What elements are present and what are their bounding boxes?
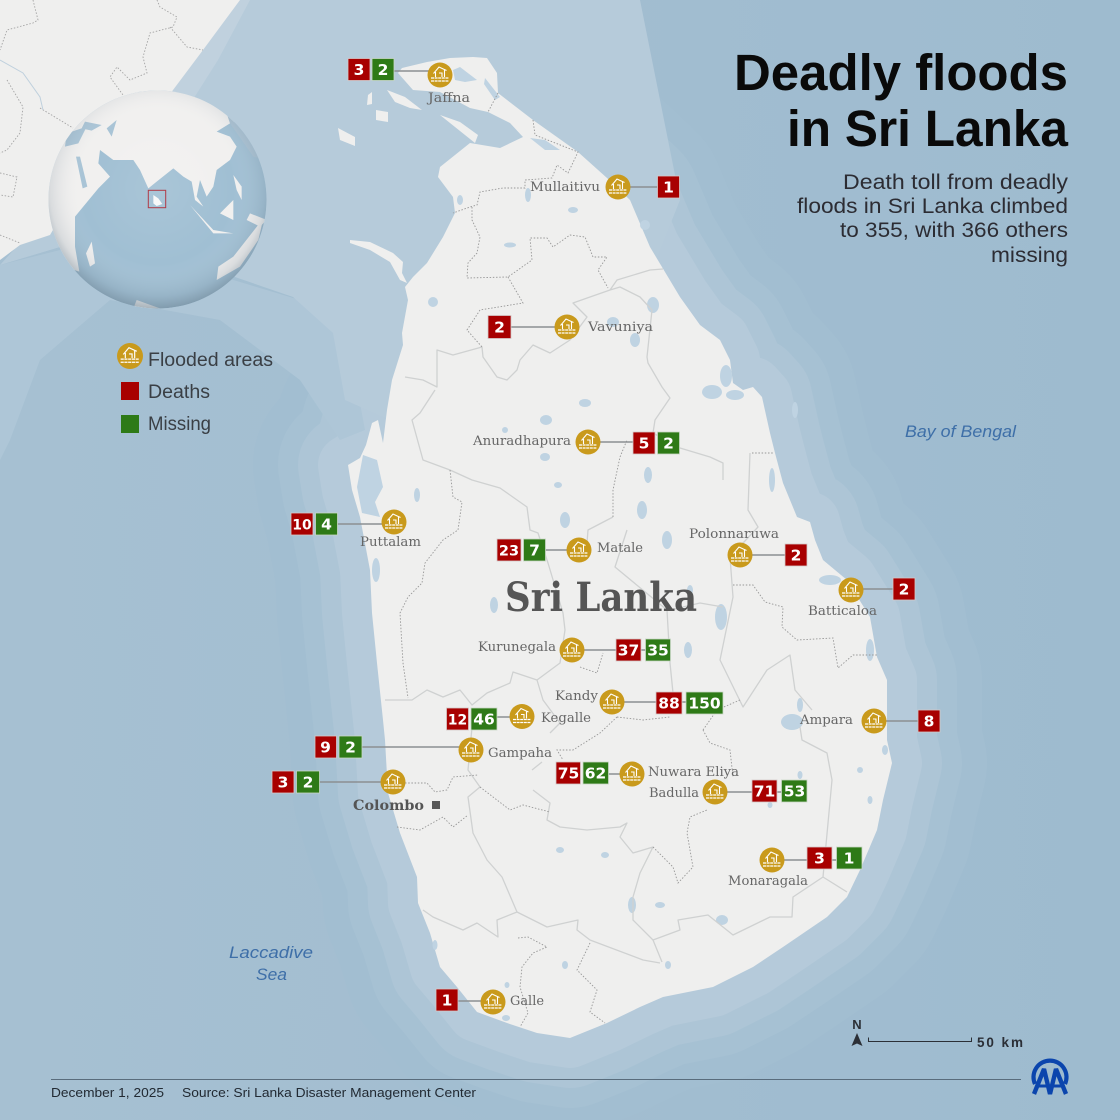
legend: Deaths	[148, 382, 210, 403]
marker: Badulla: 53	[784, 782, 805, 800]
legend: Missing	[148, 414, 211, 435]
province boundaries	[385, 269, 847, 963]
marker: Batticaloa	[808, 578, 915, 619]
marker: Jaffna: 3	[354, 61, 364, 79]
sea labels: Bay of Bengal	[905, 422, 1017, 441]
marker: Vavuniya: 2	[494, 318, 505, 336]
marker: Batticaloa: Batticaloa	[808, 604, 877, 619]
marker: Matale: Matale	[597, 541, 643, 556]
marker: Matale: 23	[499, 544, 519, 560]
legend	[117, 343, 273, 435]
marker: Anuradhapura: 5	[639, 434, 649, 452]
marker: Kegalle: Kegalle	[541, 711, 591, 726]
marker: Vavuniya	[488, 314, 653, 340]
marker: Badulla: Badulla	[649, 786, 699, 801]
icon: AA logo	[1034, 1061, 1066, 1094]
subtitle: to 355, with 366 others	[840, 218, 1068, 242]
marker: Monaragala: 1	[844, 850, 854, 868]
marker: Ampara: 8	[924, 712, 934, 730]
marker: Badulla: 71	[754, 782, 775, 800]
marker: Anuradhapura	[472, 430, 680, 454]
district boundaries	[397, 93, 877, 1027]
marker: Polonnaruwa: Polonnaruwa	[689, 527, 779, 542]
footer line	[51, 1078, 1021, 1080]
marker: Jaffna: 2	[378, 61, 388, 79]
marker: Colombo: 2	[303, 774, 313, 792]
marker: Kurunegala	[478, 638, 670, 662]
title	[734, 44, 1069, 157]
marker: Puttalam: Puttalam	[360, 535, 421, 550]
marker: Anuradhapura: Anuradhapura	[472, 434, 571, 449]
sea labels: Sea	[256, 965, 287, 984]
marker: Ampara	[799, 708, 940, 734]
marker: Mullaitivu: 1	[663, 178, 674, 196]
marker: Matale	[497, 538, 643, 562]
marker: Monaragala	[728, 847, 862, 889]
marker: Gampaha: 2	[345, 738, 356, 756]
marker: Gampaha: 9	[320, 738, 331, 756]
sea labels	[229, 422, 1017, 984]
subtitle: floods in Sri Lanka climbed	[797, 194, 1068, 218]
legend: flooded areas	[117, 343, 143, 369]
marker: Nuwara Eliya: Nuwara Eliya	[648, 765, 739, 780]
marker: Ampara: Ampara	[799, 713, 853, 728]
marker: Colombo: Colombo	[353, 798, 424, 814]
country label: Sri Lanka	[505, 574, 697, 621]
marker: Kegalle	[446, 704, 591, 730]
scale bar	[868, 1035, 1023, 1050]
legend: deaths	[121, 382, 139, 400]
marker: Puttalam: 10	[292, 518, 312, 534]
legend: missing	[121, 415, 139, 433]
marker: Matale: 7	[529, 542, 540, 560]
subtitle	[797, 170, 1068, 267]
lagoons and lakes	[357, 67, 888, 1021]
marker: Kegalle: 12	[448, 712, 467, 728]
marker: Kegalle: 46	[473, 710, 495, 728]
marker: Mullaitivu	[530, 174, 680, 200]
globe locator	[43, 83, 267, 308]
footer text	[51, 1086, 476, 1100]
marker: Nuwara Eliya: 62	[585, 764, 606, 782]
marker: Nuwara Eliya	[556, 762, 739, 786]
footer text: Source: Sri Lanka Disaster Management Center	[182, 1086, 476, 1100]
marker: Jaffna: Jaffna	[426, 91, 470, 106]
scale bar: 50 km	[977, 1035, 1023, 1050]
marker: Galle	[436, 989, 544, 1014]
marker: Monaragala: 3	[814, 850, 825, 868]
marker: Vavuniya: Vavuniya	[587, 320, 653, 335]
marker: Kandy	[555, 689, 723, 714]
marker: Batticaloa: 2	[899, 580, 909, 598]
marker: Puttalam	[291, 510, 421, 550]
subtitle: missing	[991, 243, 1068, 267]
marker: Colombo	[272, 770, 440, 814]
marker: Kurunegala: Kurunegala	[478, 640, 556, 655]
footer text: December 1, 2025	[51, 1086, 164, 1100]
locator box	[148, 190, 166, 208]
marker: Galle: 1	[442, 992, 452, 1010]
marker: Mullaitivu: Mullaitivu	[530, 180, 600, 195]
north arrow	[852, 1017, 862, 1046]
marker: Kandy: Kandy	[555, 689, 599, 704]
marker: Monaragala: Monaragala	[728, 874, 808, 889]
marker: Kandy: 88	[658, 694, 680, 712]
islands	[338, 90, 478, 283]
marker: Gampaha: Gampaha	[488, 746, 552, 761]
marker: Nuwara Eliya: 75	[558, 764, 579, 782]
marker: Gampaha	[315, 736, 552, 762]
marker: Galle: Galle	[510, 994, 544, 1009]
marker: Jaffna	[348, 58, 470, 106]
marker: Polonnaruwa	[689, 527, 807, 568]
sea labels: Laccadive	[229, 943, 313, 962]
title: in Sri Lanka	[787, 100, 1069, 157]
legend: Flooded areas	[148, 350, 273, 371]
marker: Kandy: 150	[688, 694, 721, 712]
marker: Puttalam: 4	[321, 516, 332, 534]
marker: Kurunegala: 35	[647, 642, 669, 660]
marker: Colombo: 3	[278, 774, 288, 792]
marker: Anuradhapura: 2	[663, 434, 674, 452]
marker: Badulla	[649, 780, 807, 804]
neighbouring land: India	[0, 0, 240, 260]
north arrow: N	[852, 1017, 862, 1032]
map: Sri Lanka land	[338, 57, 892, 1038]
title: Deadly floods	[734, 44, 1068, 101]
marker: Kurunegala: 37	[618, 642, 639, 660]
marker: Polonnaruwa: 2	[791, 546, 801, 564]
subtitle: Death toll from deadly	[843, 170, 1068, 194]
